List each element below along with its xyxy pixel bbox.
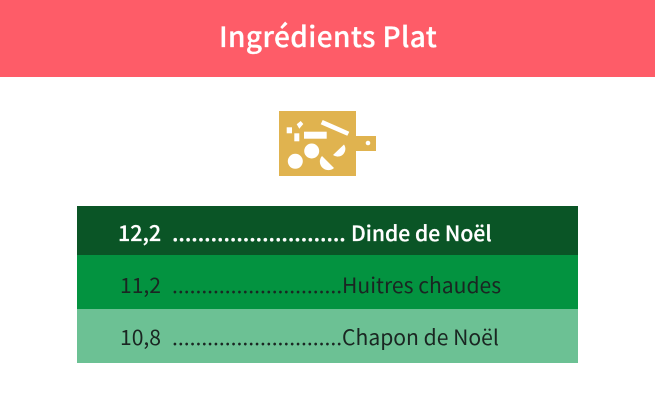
value 12,2: 12,2	[118, 217, 161, 248]
value 11,2: 11,2	[120, 270, 161, 300]
title: Ingrédients Plat	[219, 16, 437, 56]
header banner	[0, 0, 655, 77]
label: Huitres chaudes with leader dots: .............................Huitres chaudes	[172, 270, 501, 300]
icon: cutting board with food	[279, 111, 376, 176]
leader dots for Dinde de Noël: ...........................	[172, 217, 346, 248]
label: Dinde de Noël: Dinde de Noël	[351, 218, 492, 248]
row: Chapon de Noël	[77, 309, 578, 362]
row: Huitres chaudes	[77, 255, 578, 309]
value 10,8: 10,8	[120, 322, 161, 352]
label: Chapon de Noël with leader dots: .............................Chapon de Noël	[172, 322, 499, 352]
row: Dinde de Noël	[77, 206, 578, 255]
